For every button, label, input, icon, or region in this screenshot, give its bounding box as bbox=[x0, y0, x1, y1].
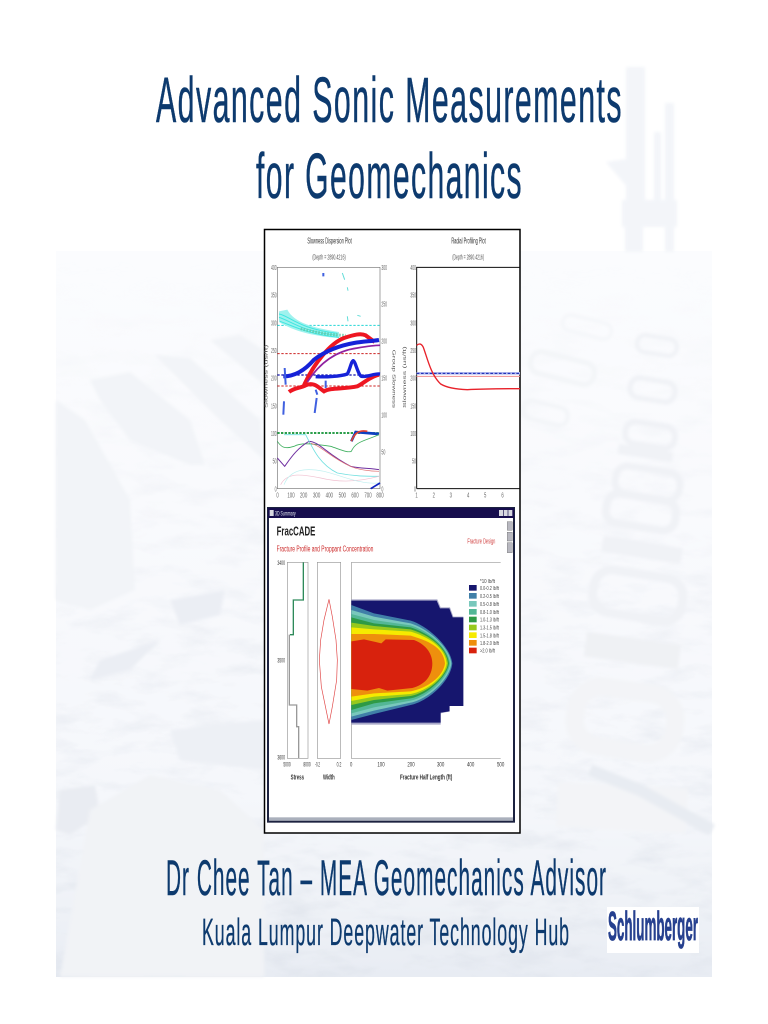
Schlumberger logo bbox=[607, 903, 699, 953]
chart: radial profiling plot: 350 bbox=[410, 291, 416, 300]
chart: radial profiling plot: 300 bbox=[410, 318, 416, 327]
design label: Fracture Design bbox=[467, 536, 495, 545]
chart: slowness dispersion plot: 100 bbox=[271, 429, 277, 438]
chart: radial profiling plot: 1 bbox=[415, 490, 418, 499]
chart: slowness dispersion plot: 400 bbox=[271, 263, 277, 272]
chart: slowness dispersion plot: Slowness Dispersion Plot bbox=[307, 236, 352, 245]
chart: slowness dispersion plot: 350 bbox=[271, 291, 277, 300]
width track: 0.2 bbox=[337, 762, 341, 769]
chart: radial profiling plot: Radial Profiling Plot bbox=[451, 236, 486, 245]
chart: slowness dispersion plot: 100 bbox=[287, 490, 295, 499]
chart: radial profiling plot: 200 bbox=[410, 374, 416, 383]
chart: radial profiling plot: 3 bbox=[450, 490, 452, 499]
chart: slowness dispersion plot: 200 bbox=[300, 490, 307, 499]
chart: slowness dispersion plot: 100 bbox=[381, 411, 387, 420]
chart: slowness dispersion plot: 0 bbox=[276, 490, 279, 499]
fracture contour plot: 100 bbox=[377, 762, 385, 769]
fracture contour plot: Fracture Half Length (ft) bbox=[400, 772, 453, 781]
chart: slowness dispersion plot: 250 bbox=[271, 346, 277, 355]
fracture contour plot: 200 bbox=[407, 762, 415, 769]
chart: slowness dispersion plot: 300 bbox=[271, 318, 277, 327]
chart: slowness dispersion plot: 0 bbox=[381, 484, 383, 493]
width track: -0.2 bbox=[315, 762, 320, 769]
chart: slowness dispersion plot: 50 bbox=[273, 457, 277, 466]
contour legend: 1.3-1.5 lb/ft bbox=[480, 626, 499, 632]
window title bar bbox=[268, 508, 514, 518]
chart subtitle: Fracture Profile and Proppant Concentration bbox=[277, 544, 373, 553]
stress track: 3600 bbox=[277, 754, 285, 761]
stress track: Stress bbox=[291, 772, 304, 781]
chart: radial profiling plot: (Depth = 2890.4216) bbox=[452, 252, 484, 261]
chart: radial profiling plot bbox=[402, 236, 520, 499]
chart: radial profiling plot: 250 bbox=[410, 346, 416, 355]
chart: slowness dispersion plot: Group Slowness bbox=[392, 350, 397, 409]
contour legend bbox=[469, 579, 499, 655]
stress track: 5000 bbox=[283, 762, 291, 769]
chart: radial profiling plot: 4 bbox=[467, 490, 469, 499]
window side buttons bbox=[507, 522, 512, 553]
stress track: 8000 bbox=[303, 762, 311, 769]
chart: slowness dispersion plot: Slowness (us/ft) bbox=[263, 344, 268, 408]
chart: radial profiling plot: 6 bbox=[501, 490, 504, 499]
chart: slowness dispersion plot: 300 bbox=[313, 490, 320, 499]
contour legend: 1.8-2.0 lb/ft bbox=[480, 641, 499, 647]
chart: slowness dispersion plot: 250 bbox=[381, 300, 387, 309]
chart: slowness dispersion plot: 800 bbox=[376, 490, 384, 499]
chart: slowness dispersion plot bbox=[263, 236, 397, 499]
fracture contour plot bbox=[350, 562, 505, 781]
chart: radial profiling plot: 150 bbox=[410, 401, 416, 410]
chart: slowness dispersion plot: 600 bbox=[351, 490, 359, 499]
stress track bbox=[277, 560, 311, 781]
slide: full page graphic bbox=[56, 68, 714, 977]
contour legend: >2.0 lb/ft bbox=[480, 649, 495, 655]
fracture contour plot: 300 bbox=[437, 762, 445, 769]
background: sea panel bbox=[56, 334, 712, 977]
chart: radial profiling plot: 5 bbox=[484, 490, 486, 499]
chart: slowness dispersion plot: 300 bbox=[381, 263, 387, 272]
width track: Width bbox=[323, 772, 335, 781]
chart: radial profiling plot: Slowness (us/ft) bbox=[402, 346, 407, 408]
width track bbox=[315, 562, 341, 781]
background: binary digits pattern bbox=[521, 313, 712, 833]
chart: slowness dispersion plot: 0 bbox=[275, 484, 277, 493]
chart: radial profiling plot: 0 bbox=[414, 484, 416, 493]
stress track: 3500 bbox=[277, 657, 285, 664]
stress track: 3400 bbox=[277, 560, 285, 567]
chart: slowness dispersion plot: 200 bbox=[271, 374, 277, 383]
chart: radial profiling plot: 50 bbox=[412, 457, 416, 466]
chart: slowness dispersion plot: 150 bbox=[381, 374, 387, 383]
chart: slowness dispersion plot: (Depth = 2890.4216) bbox=[312, 252, 346, 261]
chart: slowness dispersion plot: 700 bbox=[364, 490, 372, 499]
chart: slowness dispersion plot: 200 bbox=[381, 337, 387, 346]
chart: radial profiling plot: 100 bbox=[410, 429, 416, 438]
background: oil rig silhouette bbox=[606, 67, 677, 252]
title bbox=[156, 64, 623, 212]
fracture contour plot: 400 bbox=[467, 762, 475, 769]
contour legend: 1.5-1.8 lb/ft bbox=[480, 633, 499, 639]
FracCADE heading: FracCADE bbox=[277, 524, 315, 538]
chart: slowness dispersion plot: 150 bbox=[271, 401, 277, 410]
fracture contour plot: 0 bbox=[350, 762, 353, 769]
window title bar: 3D Summary bbox=[275, 512, 296, 518]
contour legend: 0.8-1.0 lb/ft bbox=[480, 610, 499, 616]
fracture contour plot: 500 bbox=[497, 762, 505, 769]
chart: slowness dispersion plot: 50 bbox=[381, 448, 385, 457]
chart: FracCADE summary window bbox=[268, 508, 514, 822]
chart: slowness dispersion plot: 400 bbox=[326, 490, 333, 499]
contour legend: 0.2-0.5 lb/ft bbox=[480, 594, 499, 600]
chart: radial profiling plot: 2 bbox=[433, 490, 435, 499]
chart: slowness dispersion plot: 500 bbox=[339, 490, 346, 499]
contour legend: *10 lb/ft bbox=[480, 579, 495, 585]
contour legend: 1.0-1.3 lb/ft bbox=[480, 618, 499, 624]
window frame bbox=[268, 508, 514, 822]
contour legend: 0.0-0.2 lb/ft bbox=[480, 586, 499, 592]
contour legend: 0.5-0.8 lb/ft bbox=[480, 602, 499, 608]
chart figure frame bbox=[264, 230, 520, 833]
chart: radial profiling plot: 400 bbox=[410, 263, 416, 272]
